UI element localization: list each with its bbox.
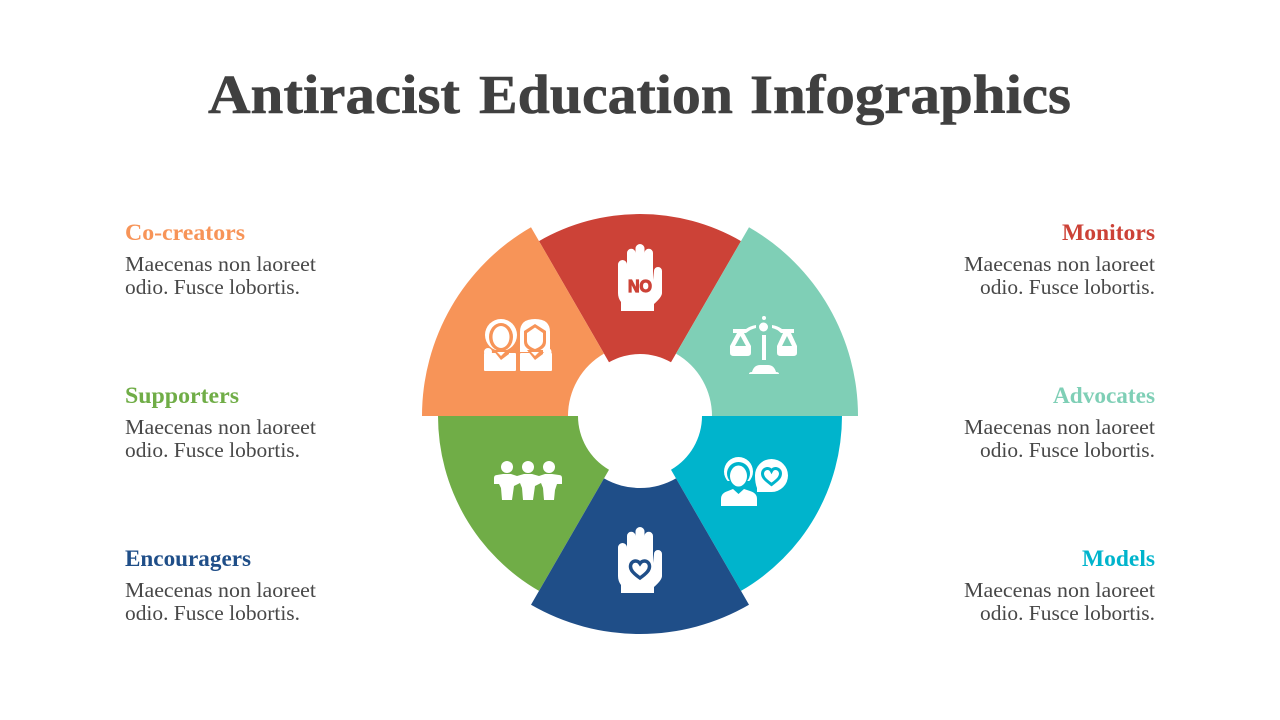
segment: Co-creators orange xyxy=(422,227,604,416)
text block: Models xyxy=(964,546,1155,625)
icon: person with heart speech bubble xyxy=(721,457,788,506)
text block: Advocates: odio. Fusce lobortis. xyxy=(980,438,1155,462)
text block: Monitors: Maecenas non laoreet xyxy=(964,252,1155,276)
text block: Models: Models xyxy=(1082,546,1155,571)
icon: hand saying no: NO xyxy=(628,276,652,296)
text block: Supporters: odio. Fusce lobortis. xyxy=(125,438,300,462)
text block: Advocates: Maecenas non laoreet xyxy=(964,415,1155,439)
segment: Monitors red xyxy=(539,214,741,362)
icon: three people xyxy=(494,461,562,500)
segment: Encouragers blue xyxy=(531,478,749,634)
text block: Encouragers xyxy=(125,546,316,625)
text block: Co-creators xyxy=(125,220,316,299)
icon: two people with halos xyxy=(484,319,552,371)
text block: Supporters xyxy=(125,383,316,462)
segment: Models teal xyxy=(671,416,842,591)
text block: Encouragers: Encouragers xyxy=(125,546,251,571)
wheel diagram xyxy=(422,214,858,634)
text block: Advocates xyxy=(964,383,1155,462)
text block: Co-creators: Co-creators xyxy=(125,220,245,245)
segment: Advocates mint xyxy=(676,227,858,416)
text block: Advocates: Advocates xyxy=(1053,383,1155,408)
icon: hand saying no xyxy=(618,244,662,311)
text block: Monitors: odio. Fusce lobortis. xyxy=(980,275,1155,299)
text block: Encouragers: odio. Fusce lobortis. xyxy=(125,601,300,625)
segment: Supporters green xyxy=(438,416,609,591)
icon: raised hand with heart xyxy=(618,527,662,593)
text block: Encouragers: Maecenas non laoreet xyxy=(125,578,316,602)
text block: Monitors xyxy=(964,220,1155,299)
text block: Co-creators: odio. Fusce lobortis. xyxy=(125,275,300,299)
title: Antiracist xyxy=(208,64,461,125)
text block: Models: Maecenas non laoreet xyxy=(964,578,1155,602)
text block: Models: odio. Fusce lobortis. xyxy=(980,601,1155,625)
text block: Monitors: Monitors xyxy=(1062,220,1155,245)
text block: Co-creators: Maecenas non laoreet xyxy=(125,252,316,276)
text block: Supporters: Maecenas non laoreet xyxy=(125,415,316,439)
text block: Supporters: Supporters xyxy=(125,383,239,408)
title: Infographics xyxy=(750,64,1071,125)
icon: scales of justice xyxy=(730,316,797,374)
title: Education xyxy=(479,64,733,125)
